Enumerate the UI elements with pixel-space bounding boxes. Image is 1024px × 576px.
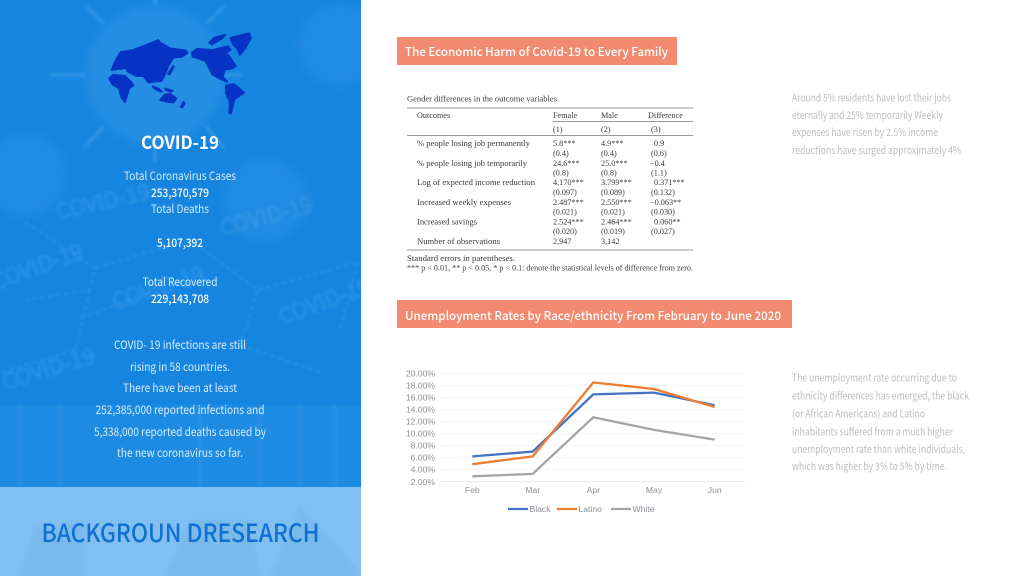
table: gender differences: Outcomes [417,111,450,120]
table: gender differences: Female [553,111,577,120]
table: gender differences: Increased savings [417,218,477,226]
panel: left sidebar background: COVID-19 [0,338,99,397]
table: gender differences: 3,142 [601,237,619,246]
legend: Black [530,504,551,514]
table: gender differences: 2.550*** [601,198,632,207]
table: gender differences: (0.6) [651,149,667,158]
table: gender differences: 2.487*** [553,198,584,207]
x axis labels: Jun [708,485,722,495]
text block: infection summary: 252,385,000 reported infections and [96,402,264,418]
series: White [472,417,715,476]
table: gender differences: (0.8) [553,168,569,178]
table: gender differences: (0.027) [651,227,675,236]
table: gender differences: 5.8*** [553,139,576,148]
panel: left sidebar background: COVID-19 [273,269,374,332]
heading: background research: BACKGROUN DRESEARCH [42,514,320,550]
table: gender differences: (2) [601,125,611,134]
text block: economic harm note: eternally and 25% temporarily Weekly [792,108,943,123]
table: gender differences: (0.020) [553,227,577,236]
table: gender differences: 2.464*** [601,218,632,226]
table: gender differences: (3) [651,125,661,134]
panel: left sidebar background: COVID-19 [107,257,208,317]
text block: infection summary: the new coronavirus so far. [117,445,243,461]
x axis labels: Apr [587,485,600,495]
y axis labels: 14.00% [406,404,435,414]
table: gender differences: *** p < 0.01, ** p < 0.05, * p < 0.1: denote the statistical levels of difference from zero. [407,264,693,272]
series: Latino [472,382,715,464]
line chart: unemployment by race [406,368,745,514]
text block: case statistics: Total Deaths [151,201,209,217]
y axis labels: 2.00% [411,477,435,487]
text block: case statistics: 5,107,392 [157,235,203,251]
table: gender differences: (0.4) [553,149,569,158]
y axis labels: 6.00% [411,453,435,463]
text block: infection summary: 5,338,000 reported deaths caused by [94,424,266,440]
table: gender differences: (0.021) [601,208,625,216]
table: gender differences: (0.019) [601,227,625,236]
legend [508,504,655,514]
table: gender differences: (0.097) [553,188,577,197]
table: gender differences: Male [601,111,618,120]
table: gender differences: % people losing job permanently [417,139,531,148]
table: gender differences: 2.524*** [553,218,584,226]
table: gender differences: Gender differences in the outcome variables. [407,94,559,104]
panel: left sidebar background: COVID-19 [216,187,316,243]
table: gender differences: (1.1) [651,168,667,178]
text block: case statistics [124,168,236,307]
table: gender differences: (0.089) [601,188,625,197]
text block: unemployment note: which was higher by 3% to 5% by time. [792,459,947,474]
panel: left sidebar background [0,0,361,487]
table: gender differences: (0.4) [601,149,617,158]
panel: bottom light band [0,487,361,576]
x axis labels: Mar [525,485,540,495]
heading: unemployment rates [397,300,792,328]
table: gender differences: Increased weekly expenses [417,198,511,207]
table: gender differences: 24.6*** [553,159,580,168]
y axis labels: 20.00% [406,368,435,378]
heading: unemployment rates: Unemployment Rates by Race/ethnicity From February to June 2020 [405,307,781,324]
text block: economic harm note [792,90,961,158]
table: gender differences: Log of expected income reduction [417,178,535,187]
text block: infection summary: There have been at least [123,380,238,396]
text block: case statistics: Total Recovered [142,274,218,290]
table: gender differences: 4.9*** [601,139,624,148]
y axis labels: 18.00% [406,380,435,390]
text block: case statistics: 229,143,708 [151,291,209,307]
text block: infection summary: rising in 58 countries. [130,359,230,375]
x axis labels [465,485,722,495]
table: gender differences [407,94,693,272]
series: Black [472,393,715,456]
text block: unemployment note: unemployment rate than white individuals, [792,442,965,457]
heading: economic harm: The Economic Harm of Covid-19 to Every Family [405,43,668,60]
text block: unemployment note: (or African Americans) and Latino [792,406,925,422]
text block: economic harm note: reductions have surged approximately 4% [792,143,961,158]
text block: unemployment note [792,370,969,474]
table: gender differences: % people losing job temporarily [417,159,528,168]
table: gender differences: 4.170*** [553,178,584,187]
icon: world map [109,33,251,113]
y axis labels: 4.00% [411,465,435,475]
text block: economic harm note: expenses have risen by 2.5% income [792,125,938,140]
table: gender differences: (0.132) [651,188,675,197]
y axis labels [406,368,435,487]
y axis labels: 16.00% [406,392,435,402]
table: gender differences: (0.030) [651,208,675,216]
heading: economic harm [397,37,677,65]
text block: infection summary [94,337,266,461]
x axis labels: Feb [465,485,480,495]
table: gender differences: 2,947 [553,237,571,246]
panel: left sidebar background: COVID-19 [52,174,153,227]
text block: unemployment note: ethnicity differences has emerged, the black [792,388,969,404]
table: gender differences: Difference [648,111,683,120]
y axis labels: 12.00% [406,416,435,426]
y axis labels: 8.00% [411,441,435,451]
table: gender differences: 0.371*** [654,178,685,187]
table: gender differences: 0.060** [654,218,681,226]
y axis labels: 10.00% [406,428,435,438]
title: COVID-19: COVID-19 [141,129,219,155]
text block: case statistics: Total Coronavirus Cases [124,168,236,184]
table: gender differences: Standard errors in parentheses. [407,254,515,263]
table: gender differences: 0.9 [654,139,664,148]
table: gender differences: 3.799*** [601,178,632,187]
table: gender differences: (0.8) [601,168,617,178]
table: gender differences: −0.063** [650,198,681,207]
x axis labels: May [646,485,663,495]
text block: unemployment note: inhabitants suffered from a much higher [792,424,954,440]
table: gender differences: Number of observations [417,237,500,246]
text block: economic harm note: Around 5% residents have lost their jobs [792,90,951,106]
table: gender differences: −0.4 [650,159,665,168]
table: gender differences: 25.0*** [601,159,628,168]
table: gender differences: (1) [553,125,563,134]
table: gender differences: (0.021) [553,208,577,216]
legend: Latino [578,504,602,514]
legend: White [632,504,655,514]
text block: case statistics: 253,370,579 [151,185,209,201]
text block: unemployment note: The unemployment rate occurring due to [792,370,957,386]
text block: infection summary: COVID- 19 infections are still [114,337,246,353]
